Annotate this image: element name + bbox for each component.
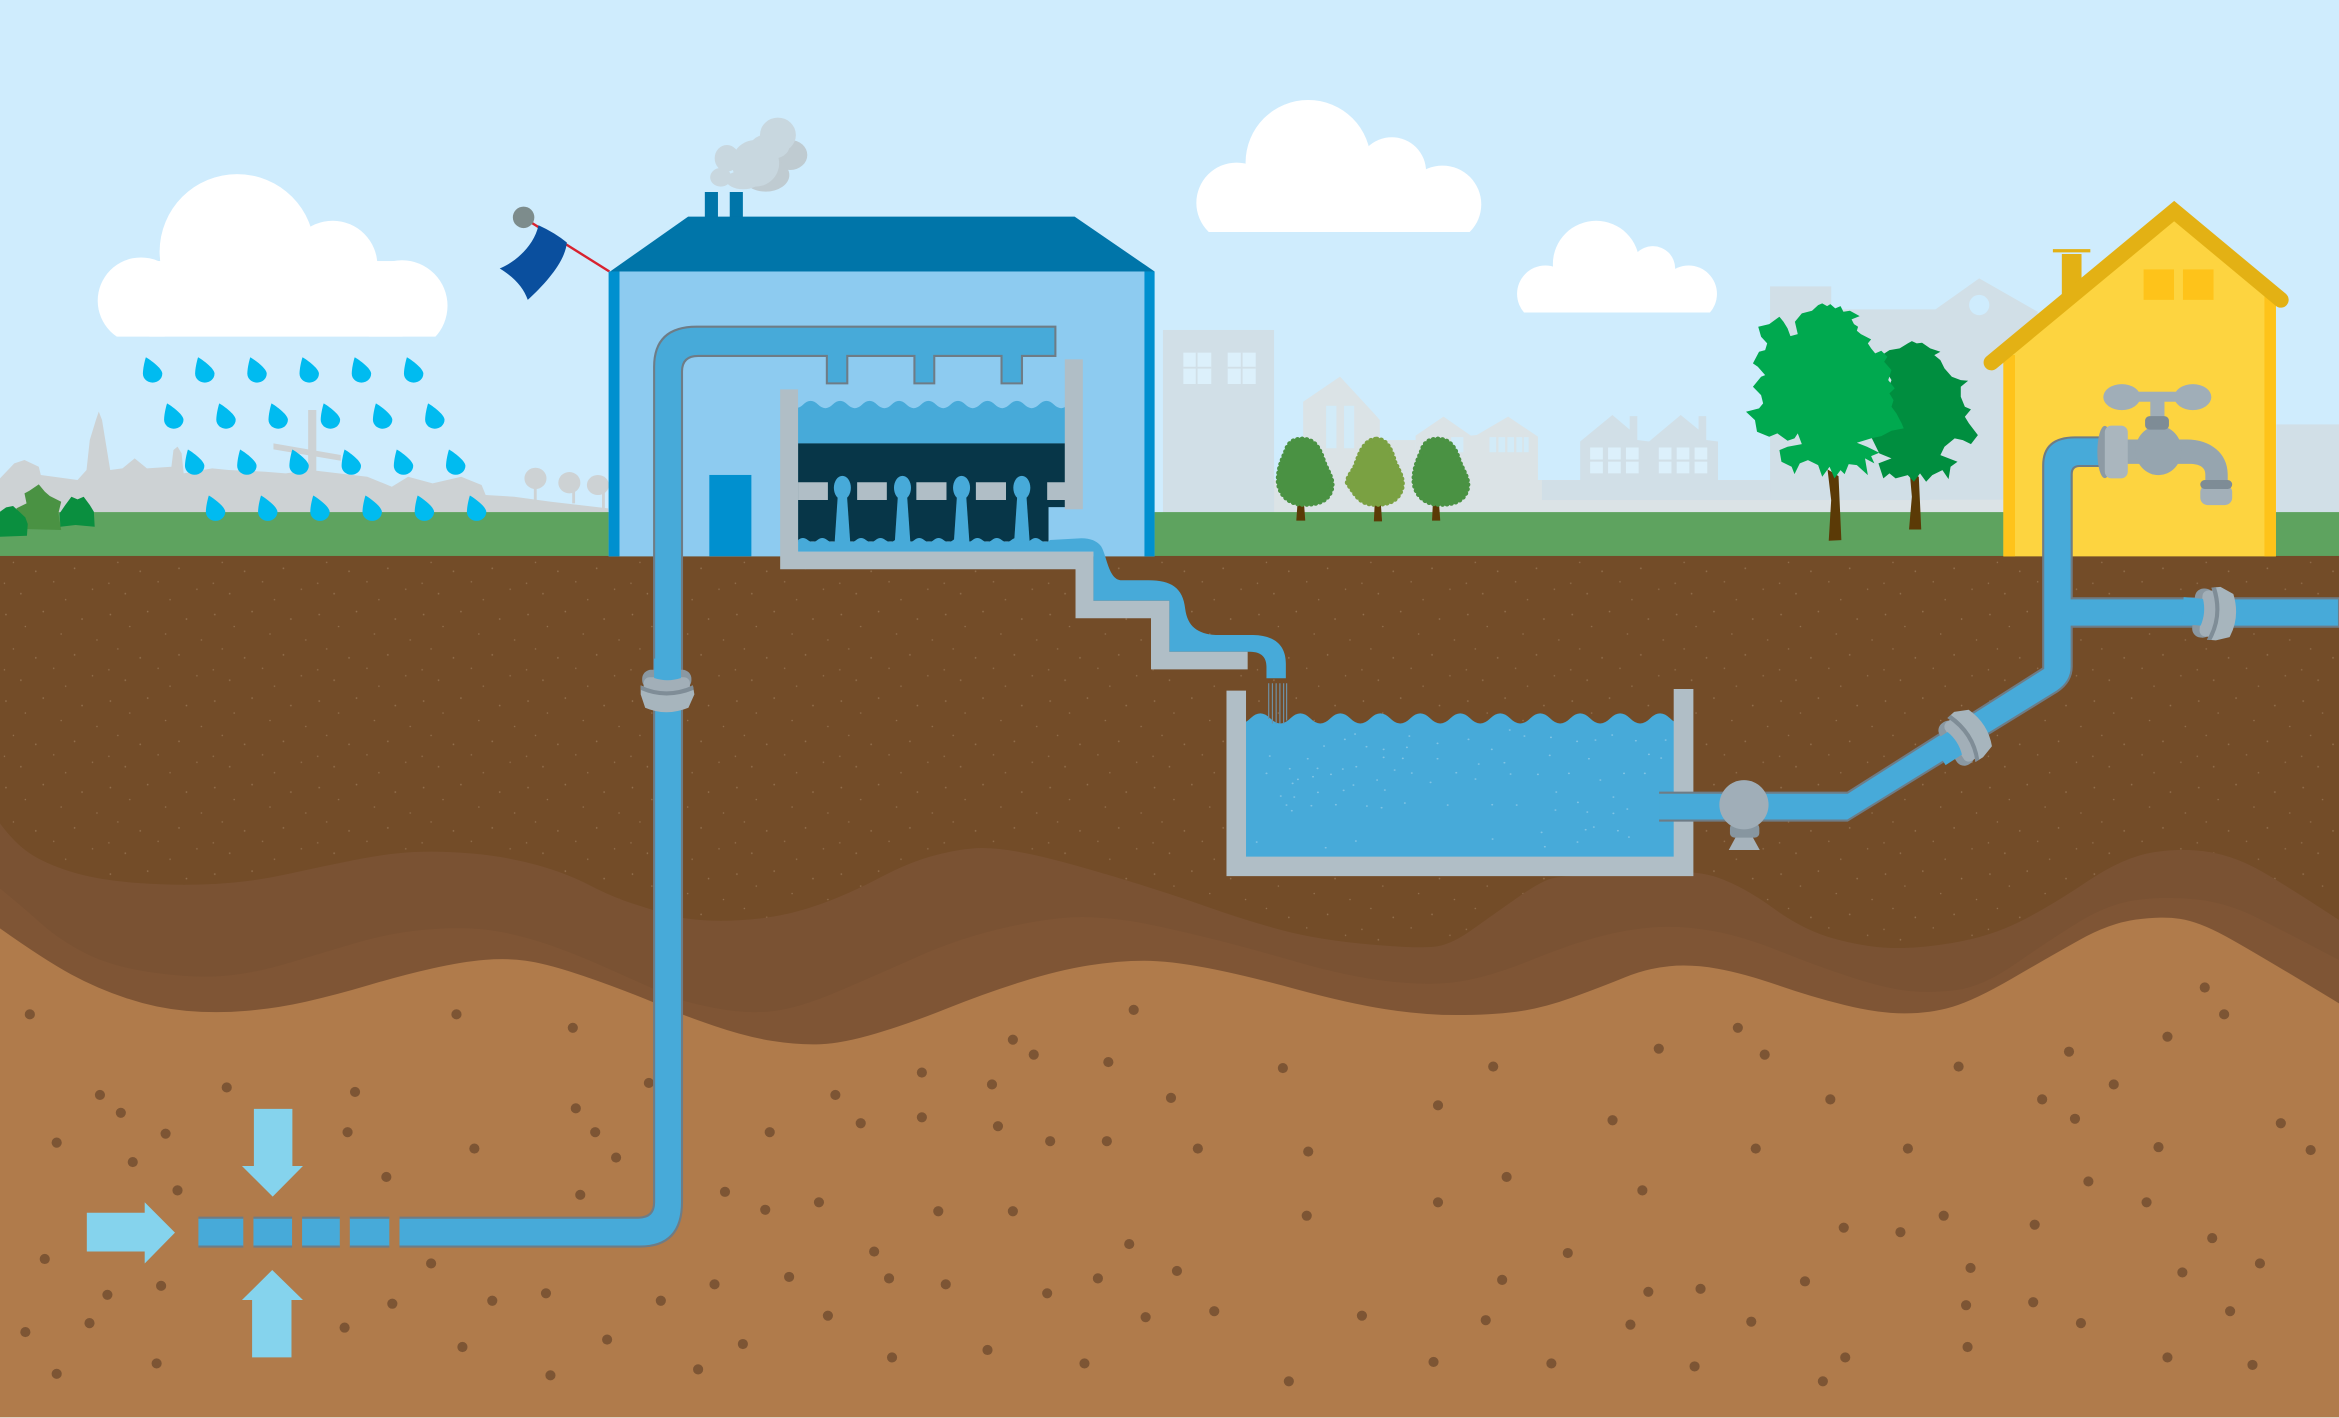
roof (610, 217, 1155, 271)
flag (500, 225, 567, 300)
filter droplets (834, 476, 1030, 543)
valve nozzle (1729, 835, 1760, 850)
wall sides (609, 271, 1155, 556)
attic windows (2144, 269, 2214, 300)
sandy aquifer (0, 918, 2339, 1417)
background tall houses behind trees (1770, 278, 2339, 514)
arrow: groundwater from left (87, 1202, 175, 1263)
water flow to reservoir (798, 538, 1286, 678)
smoke from chimneys (710, 118, 807, 192)
tree (1414, 439, 1468, 521)
intake pipe from well to filter (399, 327, 1055, 1247)
back tree (1871, 341, 1978, 529)
dark filter bed (798, 443, 1065, 541)
tap stem (2150, 397, 2164, 422)
tap flange (2097, 426, 2128, 478)
valve ball (1719, 780, 1769, 829)
sand filter tank (780, 359, 1286, 678)
wind flag with pole (500, 207, 609, 300)
soil specks (0, 556, 2339, 944)
tap collar (2145, 416, 2169, 430)
tree (1278, 439, 1332, 521)
cloud: small right (1517, 221, 1717, 322)
reservoir water (1230, 713, 1690, 862)
valve collar (1730, 823, 1759, 838)
pole knob (513, 207, 534, 228)
low background band (1164, 480, 2339, 514)
treatment building (609, 192, 1155, 556)
background town right (1163, 278, 2339, 514)
raw water on top of filter (789, 401, 1069, 443)
clean water reservoir (1226, 683, 1693, 876)
distribution pipe to house (1659, 437, 2339, 821)
right filter wall (1065, 359, 1083, 509)
roof (1991, 211, 2281, 362)
reservoir concrete walls (1226, 689, 1693, 876)
tap spout (2124, 439, 2228, 486)
background building with windows (1163, 330, 1274, 513)
upper clay band (0, 823, 2339, 1417)
tap body (2135, 426, 2182, 475)
arrow: groundwater from above (242, 1109, 303, 1197)
house walls (2003, 213, 2276, 556)
sky background (0, 0, 2339, 515)
pipe coupling on well pipe (641, 659, 694, 712)
background houses middle (1303, 377, 1538, 513)
tree (1347, 439, 1402, 521)
grass strip (0, 512, 2339, 557)
tap handle (2103, 384, 2211, 410)
tap nozzle (2200, 480, 2232, 505)
chimneys (705, 192, 743, 218)
soil layers (0, 823, 2339, 1417)
ground: dark topsoil (0, 556, 2339, 1417)
rain drops (143, 357, 486, 521)
falling water streams (1269, 683, 1287, 723)
walls (609, 271, 1155, 556)
large trees (1746, 303, 1978, 541)
well screen slots (198, 1218, 389, 1247)
pipe coupling on branch pipe (2180, 584, 2238, 642)
pipe coupling on diagonal pipe (1924, 702, 1998, 776)
distant skyline left (0, 410, 609, 513)
valve on reservoir outlet (1719, 780, 1769, 850)
door (709, 475, 751, 556)
aquifer pebbles (20, 982, 2316, 1386)
background row houses (1542, 415, 1930, 500)
yellow house (1991, 211, 2281, 556)
filter bed bars (798, 482, 1065, 500)
flag pole (524, 218, 609, 271)
water tap (2097, 384, 2232, 505)
cloud: top middle (1196, 100, 1481, 243)
concrete walls and stepped channel (780, 389, 1248, 669)
lower clay band (0, 888, 2339, 1417)
arrow: groundwater from below (242, 1270, 303, 1357)
small trees row (1278, 439, 1468, 521)
front tree (1746, 303, 1904, 541)
house chimney (2053, 249, 2090, 298)
cloud: rain cloud (98, 174, 448, 351)
house wall sides (2003, 291, 2276, 556)
water sparkle dots (1257, 730, 1666, 848)
bushes left (0, 484, 95, 537)
